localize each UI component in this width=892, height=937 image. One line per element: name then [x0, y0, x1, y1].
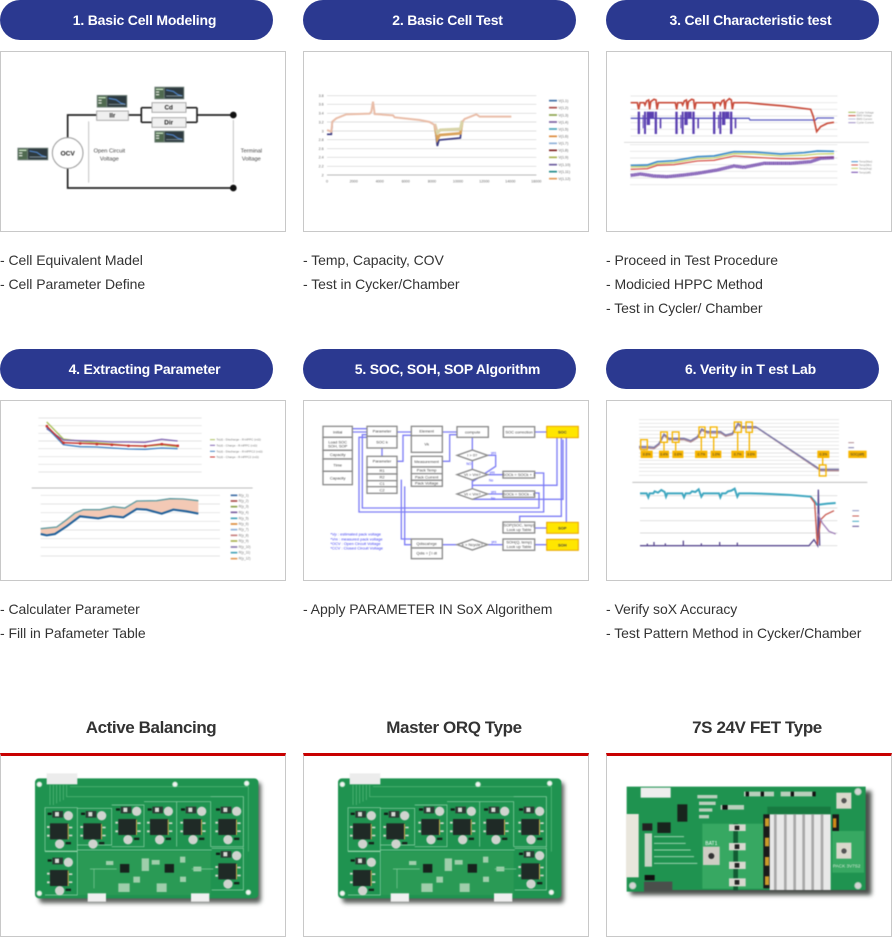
panel: verification charts: 0.6%: [674, 453, 682, 457]
panel: verification charts: 0.4%: [660, 453, 668, 457]
panel: equivalent circuit diagram: Dir: [164, 120, 174, 127]
panel: extracted parameter charts: [0, 400, 286, 581]
text block: step 3 notes: - Proceed in Test Procedure: [606, 252, 778, 268]
panel: cell test voltage chart: 2.6: [319, 147, 324, 151]
panel: SoX algorithm flowchart: [303, 400, 589, 581]
text block: step 5 notes: - Apply PARAMETER IN SoX Algorithem: [303, 601, 552, 617]
panel: equivalent circuit diagram: Open Circuit: [94, 149, 125, 155]
heading: step 4: 4. Extracting Parameter: [69, 361, 220, 377]
panel: SoX algorithm flowchart: Capacity: [330, 475, 345, 480]
heading: Master ORQ Type: Master ORQ Type: [386, 718, 522, 737]
panel: cell test voltage chart: [303, 51, 589, 232]
heading: step 3: [606, 0, 879, 40]
panel: cell test voltage chart: 8000: [428, 180, 436, 184]
text block: step 4 notes: [0, 601, 146, 641]
panel: SoX algorithm flowchart: Vk: [424, 441, 429, 446]
panel: 7S 24V FET board: [606, 753, 892, 937]
panel: cell test voltage chart: 2.4: [319, 156, 324, 160]
panel: cell test voltage chart: V(1,5): [558, 127, 568, 131]
panel: SoX algorithm flowchart: C2: [379, 487, 385, 492]
text block: step 1 notes: - Cell Parameter Define: [0, 276, 145, 292]
heading: Active Balancing: Active Balancing: [86, 718, 216, 737]
panel: equivalent circuit diagram: [0, 51, 286, 232]
panel: equivalent circuit diagram: Voltage: [242, 157, 261, 163]
panel: SoX algorithm flowchart: SOC k: [376, 439, 388, 444]
text block: step 2 notes: [303, 252, 460, 292]
panel: SoX algorithm flowchart: Parameter: [373, 428, 392, 433]
panel: SoX algorithm flowchart: yes: [491, 540, 497, 544]
panel: SoX algorithm flowchart: yes: [491, 451, 497, 455]
panel: cell characteristic charts: BMS Voltage: [857, 114, 873, 118]
panel: SoX algorithm flowchart: SOCk = SOCk - 1: [503, 491, 536, 496]
panel: cell characteristic charts: BMS Current: [857, 117, 872, 121]
panel: SoX algorithm flowchart: Measurement: [414, 459, 440, 464]
panel: SoX algorithm flowchart: Qdis = ∫ I dt: [416, 551, 438, 556]
panel: SoX algorithm flowchart: NO: [466, 462, 472, 466]
panel: extracted parameter charts: R(y_3): [239, 505, 249, 509]
text block: step 1 notes: - Cell Equivalent Madel: [0, 252, 143, 268]
panel: extracted parameter charts: R(y_10): [239, 545, 251, 549]
panel: SoX algorithm flowchart: k > Ncycle?: [462, 542, 483, 547]
panel: cell test voltage chart: 2.8: [319, 138, 324, 142]
panel: SoX algorithm flowchart: *OCV : Open Circuit Voltage: [330, 541, 381, 546]
panel: cell test voltage chart: V(1,11): [558, 170, 570, 174]
panel: SoX algorithm flowchart: SOCk = SOCk + 1: [503, 472, 536, 477]
text block: step 3 notes: - Modicied HPPC Method: [606, 276, 763, 292]
panel: equivalent circuit diagram: Voltage: [100, 157, 119, 163]
panel: SoX algorithm flowchart: R2: [379, 475, 385, 480]
panel: SoX algorithm flowchart: Capacity: [330, 452, 345, 457]
panel: SoX algorithm flowchart: SOC correction: [505, 429, 533, 434]
panel: SoX algorithm flowchart: No: [489, 478, 493, 482]
panel: SoX algorithm flowchart: SOH: [558, 542, 567, 547]
panel: extracted parameter charts: R(y_1): [239, 493, 249, 497]
panel: cell test voltage chart: 16000: [531, 180, 541, 184]
panel: SoX algorithm flowchart: Vt > Vm?: [464, 472, 481, 477]
panel: 7S 24V FET board: BAT1: [705, 841, 718, 847]
text block: step 6 notes: [606, 601, 862, 641]
panel: cell test voltage chart: V(1,2): [558, 106, 568, 110]
panel: extracted parameter charts: R(y_4): [239, 510, 249, 514]
panel: extracted parameter charts: Ts(d) - Charge - R-HPPC2 (mΩ): [216, 455, 259, 459]
panel: cell characteristic charts: Cycler Voltage: [857, 110, 874, 114]
panel: cell test voltage chart: 4000: [376, 180, 384, 184]
panel: cell characteristic charts: Temp(Min): [859, 163, 872, 167]
panel: SoX algorithm flowchart: R1: [379, 468, 385, 473]
panel: SoX algorithm flowchart: i > 0?: [467, 453, 478, 458]
panel: extracted parameter charts: R(y_5): [239, 516, 249, 520]
panel: cell test voltage chart: 3.6: [319, 103, 324, 107]
panel: equivalent circuit diagram: OCV: [60, 150, 75, 157]
panel: equivalent circuit diagram: Ilr: [109, 113, 116, 120]
panel: cell test voltage chart: 0: [326, 180, 328, 184]
panel: SoX algorithm flowchart: C1: [379, 481, 385, 486]
panel: SoX algorithm flowchart: SOH, SOP: [328, 443, 348, 448]
panel: SoX algorithm flowchart: Pack Temp: [417, 468, 437, 473]
panel: verification charts: 0.7%: [698, 453, 705, 457]
panel: SoX algorithm flowchart: Parameter: [373, 459, 392, 464]
heading: step 2: 2. Basic Cell Test: [392, 12, 503, 28]
panel: extracted parameter charts: R(y_2): [239, 499, 249, 503]
panel: extracted parameter charts: Ts(d) - Charge - R-HPPC (mΩ): [216, 443, 257, 447]
panel: verification charts: [606, 400, 892, 581]
panel: cell test voltage chart: 6000: [402, 180, 410, 184]
panel: cell test voltage chart: V(1,8): [558, 149, 568, 153]
panel: cell characteristic charts: [606, 51, 892, 232]
panel: cell test voltage chart: V(1,1): [558, 99, 568, 103]
panel: cell test voltage chart: 3.2: [319, 120, 324, 124]
panel: SoX algorithm flowchart: *Vm : measured pack voltage: [330, 536, 383, 541]
panel: verification charts: 0.6%: [643, 453, 650, 457]
heading: step 5: 5. SOC, SOH, SOP Algorithm: [355, 361, 540, 377]
panel: SoX algorithm flowchart: yes: [491, 490, 497, 494]
panel: extracted parameter charts: R(y_6): [239, 522, 249, 526]
panel: SoX algorithm flowchart: No: [491, 496, 495, 500]
heading: step 3: 3. Cell Characteristic test: [670, 12, 831, 28]
panel: equivalent circuit diagram: Terminal: [241, 149, 262, 155]
panel: cell characteristic charts: Cycler Current: [857, 121, 874, 125]
panel: SoX algorithm flowchart: Initial: [333, 429, 342, 434]
panel: equivalent circuit diagram: Cd: [164, 105, 173, 112]
panel: cell test voltage chart: V(1,4): [558, 120, 568, 124]
panel: cell test voltage chart: V(1,7): [558, 142, 568, 146]
panel: SoX algorithm flowchart: SOP(SOC, temp): [504, 523, 535, 528]
heading: step 6: [606, 349, 879, 389]
panel: SoX algorithm flowchart: Look up Table: [507, 527, 532, 532]
panel: Master ORQ board: [303, 753, 589, 937]
panel: extracted parameter charts: R(y_8): [239, 533, 249, 537]
panel: SoX algorithm flowchart: Time: [333, 463, 343, 468]
panel: cell test voltage chart: 2000: [350, 180, 358, 184]
heading: step 1: 1. Basic Cell Modeling: [73, 12, 216, 28]
panel: SoX algorithm flowchart: yes: [490, 470, 495, 474]
text block: step 4 notes: - Calculater Parameter: [0, 601, 140, 617]
panel: SoX algorithm flowchart: Qdiscahrge: [416, 541, 438, 546]
panel: SoX algorithm flowchart: Look up Table: [507, 544, 532, 549]
panel: SoX algorithm flowchart: Vt < Vm?: [464, 491, 481, 496]
panel: extracted parameter charts: R(y_11): [239, 551, 250, 555]
text block: step 1 notes: [0, 252, 145, 292]
panel: extracted parameter charts: R(y_7): [239, 528, 249, 532]
panel: cell test voltage chart: 3.4: [319, 112, 324, 116]
panel: SoX algorithm flowchart: Element: [419, 429, 435, 434]
panel: cell characteristic charts: Temp(Max): [859, 160, 872, 164]
heading: step 1: [0, 0, 273, 40]
text block: step 2 notes: - Test in Cycker/Chamber: [303, 276, 459, 292]
text block: step 2 notes: - Temp, Capacity, COV: [303, 252, 444, 268]
panel: SoX algorithm flowchart: Pack Voltage: [415, 481, 439, 486]
panel: extracted parameter charts: Ts(d) - Discharge - R-HPPC2 (mΩ): [216, 449, 263, 453]
panel: cell test voltage chart: 3: [322, 129, 324, 133]
panel: SoX algorithm flowchart: compute: [465, 429, 481, 434]
panel: cell test voltage chart: V(1,9): [558, 156, 568, 160]
panel: cell test voltage chart: V(1,12): [558, 177, 570, 181]
panel: extracted parameter charts: R(y_12): [239, 557, 251, 561]
panel: verification charts: 1.0%: [712, 453, 720, 457]
heading: step 6: 6. Verity in T est Lab: [685, 361, 816, 377]
panel: cell test voltage chart: 10000: [453, 180, 463, 184]
panel: cell characteristic charts: Temp(Avg): [859, 166, 872, 170]
text block: step 6 notes: - Test Pattern Method in Cycker/Chamber: [606, 625, 861, 641]
heading: step 2: [303, 0, 576, 40]
heading: 7S 24V FET Type: 7S 24V FET Type: [692, 718, 822, 737]
panel: extracted parameter charts: R(y_9): [239, 539, 249, 543]
heading: step 4: [0, 349, 273, 389]
panel: cell test voltage chart: 12000: [479, 180, 489, 184]
panel: verification charts: 0.7%: [734, 453, 741, 457]
panel: cell test voltage chart: V(1,10): [558, 163, 570, 167]
panel: Active Balancing board: [0, 753, 286, 937]
heading: step 5: [303, 349, 576, 389]
panel: cell test voltage chart: 2.2: [319, 165, 324, 169]
panel: extracted parameter charts: Ts(d) - Discharge - R-HPPC (mΩ): [216, 438, 261, 442]
panel: cell test voltage chart: 2: [322, 173, 324, 177]
text block: step 3 notes: - Test in Cycler/ Chamber: [606, 300, 762, 316]
panel: SoX algorithm flowchart: *CCV : Closed Circuit Voltage: [330, 546, 384, 551]
panel: SoX algorithm flowchart: SOP: [558, 525, 567, 530]
panel: cell test voltage chart: V(1,6): [558, 135, 568, 139]
panel: 7S 24V FET board: PACK 3V7S2: [833, 864, 861, 869]
panel: SoX algorithm flowchart: Pack Current: [415, 474, 439, 479]
text block: step 6 notes: - Verify soX Accuracy: [606, 601, 737, 617]
panel: cell test voltage chart: 14000: [505, 180, 515, 184]
text block: step 3 notes: [606, 252, 778, 316]
panel: SoX algorithm flowchart: *Vp : estimated pack voltage: [330, 532, 382, 537]
panel: SoX algorithm flowchart: Load SOC: [328, 439, 347, 444]
panel: verification charts: SOC(diff): [850, 453, 864, 457]
panel: cell test voltage chart: V(1,3): [558, 113, 568, 117]
panel: verification charts: 0.3%: [820, 453, 827, 457]
panel: cell test voltage chart: 3.8: [319, 94, 324, 98]
panel: cell characteristic charts: Temp(diff): [859, 170, 871, 174]
panel: verification charts: 0.6%: [747, 453, 755, 457]
panel: SoX algorithm flowchart: SOC: [558, 429, 567, 434]
text block: step 4 notes: - Fill in Pafameter Table: [0, 625, 146, 641]
panel: SoX algorithm flowchart: SOH(Q, temp): [506, 540, 532, 545]
